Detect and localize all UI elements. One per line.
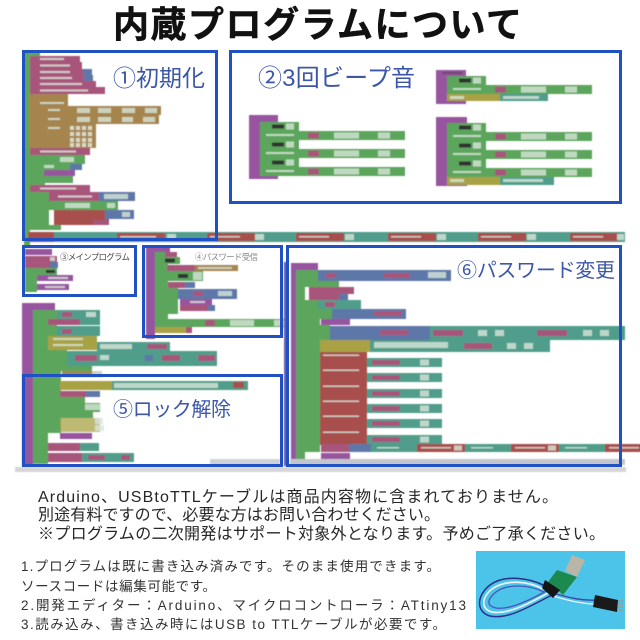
heading: three beeps: ②3回ビープ音 [258, 65, 415, 92]
text block: program notes: ソースコードは編集可能です。 [21, 579, 216, 594]
heading: unlock: ⑤ロック解除 [113, 398, 231, 421]
code blocks: beep function left [249, 115, 405, 179]
text block: notice: Arduino、USBtoTTLケーブルは商品内容物に含まれておりません。 [38, 487, 558, 506]
panel: 6 password change [288, 246, 620, 466]
code blocks: password change [284, 262, 640, 466]
photo: USB to TTL cable [476, 551, 625, 629]
text block: program notes: 2.開発エディター：Arduino、マイクロコントローラ：ATtiny13 [21, 597, 466, 613]
text block: program notes: 3.読み込み、書き込み時にはUSB to TTLケーブルが必要です。 [21, 616, 446, 632]
code blocks: reset row [28, 232, 625, 242]
gray scroll bars [15, 459, 626, 472]
panel: 3 main program [24, 246, 136, 296]
text block: program notes: 1.プログラムは既に書き込み済みです。そのまま使用できます。 [21, 558, 440, 574]
text block: program notes [21, 558, 466, 632]
panel: 2 three beeps [230, 52, 620, 202]
title: 内蔵プログラムについて [113, 4, 522, 45]
code blocks: initialization [24, 51, 161, 246]
text block: notice: 別途有料ですので、必要な方はお問い合わせください。 [38, 506, 440, 524]
panel: 5 unlock [24, 376, 282, 466]
code blocks: beep function right [436, 117, 592, 186]
heading: password change: ⑥パスワード変更 [457, 259, 615, 282]
code blocks: unlock [22, 303, 248, 466]
heading: main program: ③メインプログラム [60, 252, 130, 262]
code blocks: main program [25, 249, 73, 292]
text block: notice: ※プログラムの二次開発はサポート対象外となります。予めご了承ください。 [38, 525, 605, 543]
text block: notice [38, 487, 605, 543]
heading: password receive: ④パスワード受信 [195, 252, 258, 262]
panel: 1 initialization [24, 52, 216, 240]
panel: 4 password receive [144, 246, 282, 336]
code blocks: beep function top [436, 70, 592, 104]
heading: initialization: ①初期化 [113, 65, 205, 91]
code blocks: password receive [146, 247, 285, 339]
screenshot: program blocks [15, 51, 640, 472]
